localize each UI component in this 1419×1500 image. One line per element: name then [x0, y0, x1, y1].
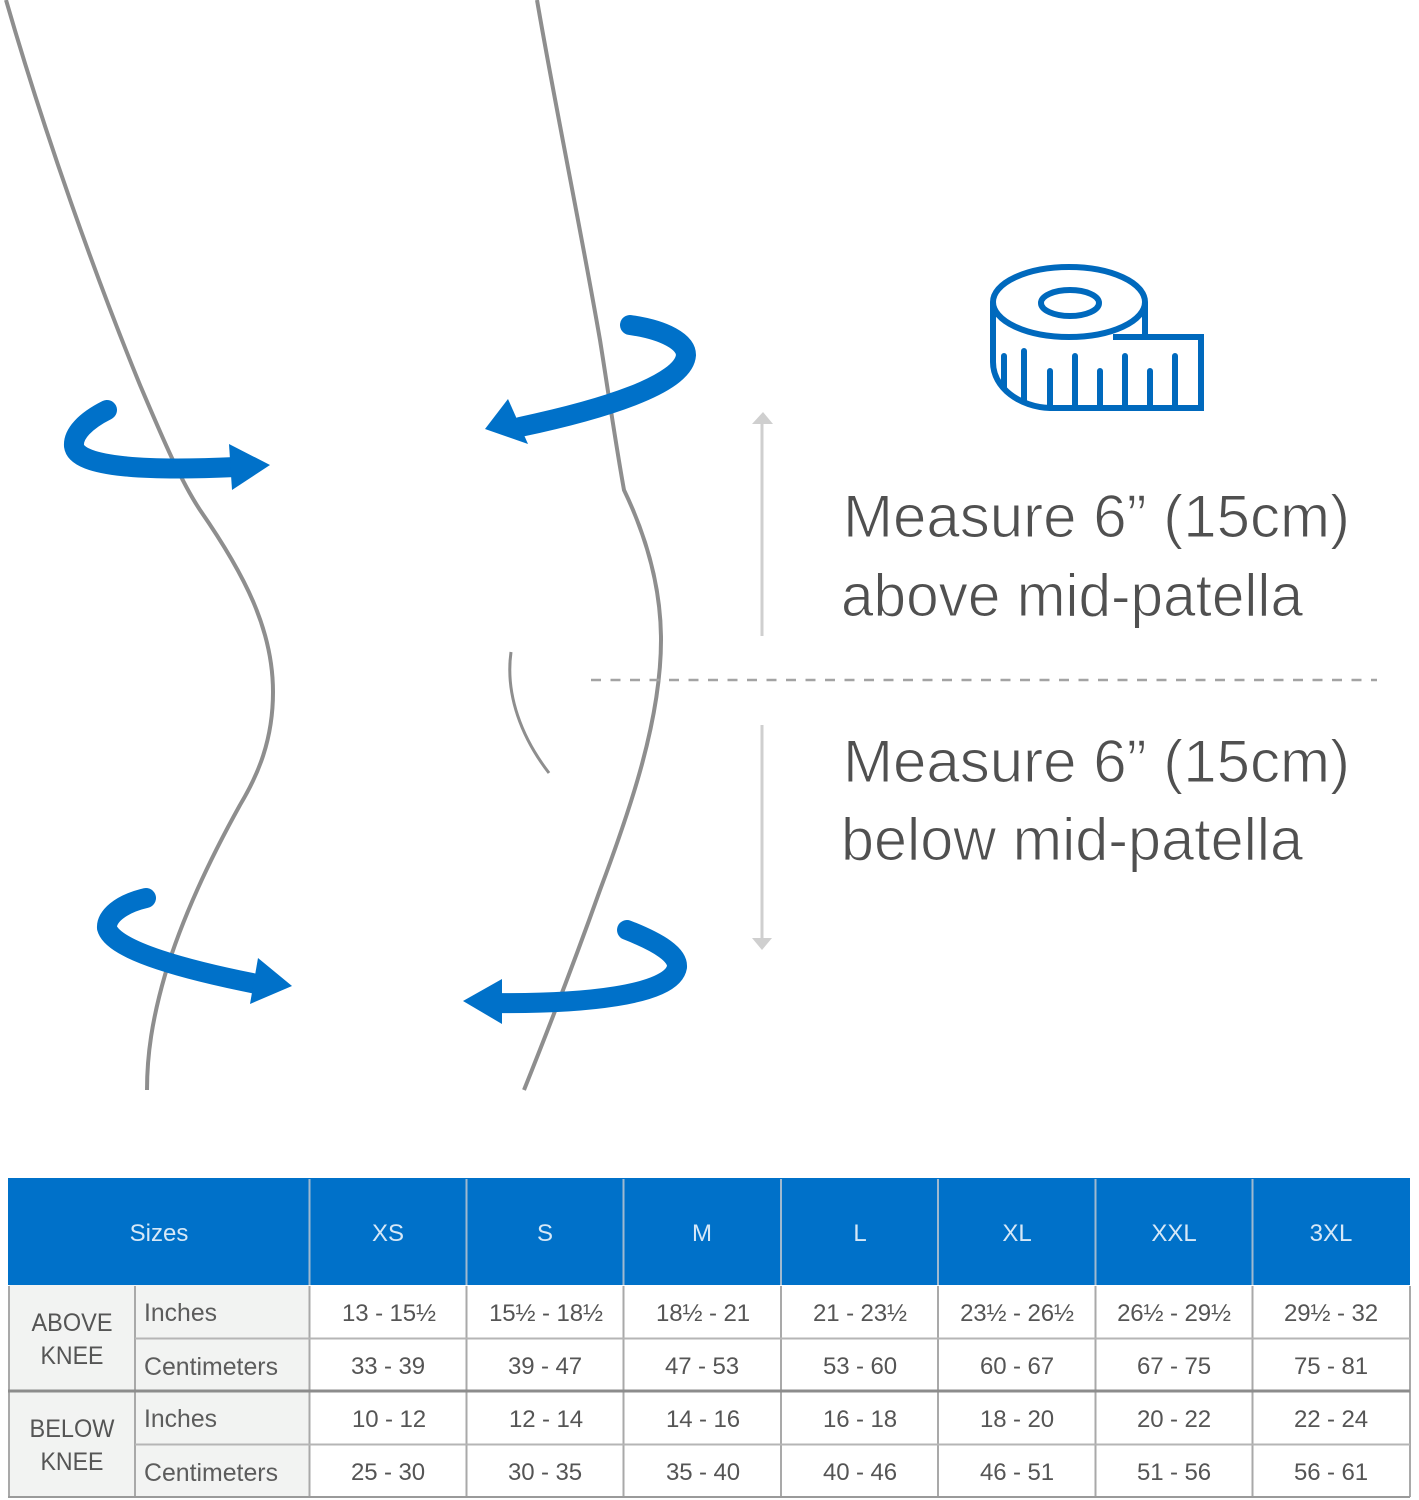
below knee inches row: 14 - 16: [666, 1406, 740, 1433]
arrow: lower left wrap: [107, 898, 292, 1004]
above knee inches row: 15½ - 18½: [489, 1300, 603, 1327]
below knee centimeters row: 51 - 56: [1137, 1459, 1211, 1486]
above knee centimeters row: 39 - 47: [508, 1353, 582, 1380]
above knee centimeters row: [351, 1353, 1368, 1380]
leg outline: left contour: [6, 0, 273, 1090]
header labels: XXL: [1151, 1220, 1197, 1247]
group label: above knee: ABOVE: [32, 1309, 112, 1337]
above knee inches row: 23½ - 26½: [960, 1300, 1074, 1327]
above knee inches row: [342, 1300, 1378, 1327]
unit labels: [144, 1299, 278, 1487]
unit labels: Centimeters: [144, 1459, 278, 1487]
below knee centimeters row: 25 - 30: [351, 1459, 425, 1486]
leg outline: right contour: [524, 0, 661, 1090]
above knee inches row: 18½ - 21: [656, 1300, 750, 1327]
group label: below knee: [30, 1415, 115, 1476]
table grid: [8, 1179, 1410, 1497]
group label: below knee: KNEE: [40, 1448, 104, 1476]
below knee inches row: 16 - 18: [823, 1406, 897, 1433]
header labels: [130, 1220, 1352, 1247]
above knee centimeters row: 47 - 53: [665, 1353, 739, 1380]
unit labels: Inches: [144, 1299, 217, 1327]
text: measure above: above mid-patella: [841, 562, 1304, 629]
unit labels: Centimeters: [144, 1353, 278, 1381]
below knee inches row: 18 - 20: [980, 1406, 1054, 1433]
text: measure above: Measure 6” (15cm): [843, 483, 1350, 550]
above knee centimeters row: 67 - 75: [1137, 1353, 1211, 1380]
above knee inches row: 29½ - 32: [1284, 1300, 1378, 1327]
above knee inches row: 13 - 15½: [342, 1300, 436, 1327]
header labels: M: [692, 1220, 712, 1247]
header labels: 3XL: [1310, 1220, 1352, 1247]
header labels: Sizes: [130, 1220, 188, 1247]
arrow: upper right wrap: [485, 325, 686, 444]
header labels: XS: [372, 1220, 404, 1247]
text: measure below: [841, 728, 1350, 873]
kneecap contour: [510, 652, 549, 773]
below knee inches row: [352, 1406, 1368, 1433]
above knee inches row: 26½ - 29½: [1117, 1300, 1231, 1327]
below knee inches row: 10 - 12: [352, 1406, 426, 1433]
below knee centimeters row: 35 - 40: [666, 1459, 740, 1486]
arrow: six inches above patella: [752, 412, 773, 636]
group label: below knee: BELOW: [30, 1415, 115, 1443]
header labels: XL: [1002, 1220, 1032, 1247]
above knee inches row: 21 - 23½: [813, 1300, 907, 1327]
icon: measuring tape: [993, 267, 1201, 408]
mid-patella dashed line: [591, 679, 1377, 681]
arrow: lower right wrap: [463, 930, 677, 1024]
unit labels: Inches: [144, 1405, 217, 1433]
above knee centimeters row: 33 - 39: [351, 1353, 425, 1380]
below knee centimeters row: 46 - 51: [980, 1459, 1054, 1486]
above knee centimeters row: 60 - 67: [980, 1353, 1054, 1380]
arrow: upper left wrap: [74, 410, 270, 490]
text: measure below: below mid-patella: [841, 806, 1304, 873]
arrow: six inches below patella: [752, 725, 772, 950]
group label: above knee: [32, 1309, 112, 1370]
sizing table: [8, 1178, 1410, 1497]
group label: above knee: KNEE: [40, 1342, 104, 1370]
text: measure above: [841, 483, 1350, 629]
table header band: [8, 1178, 1410, 1285]
below knee inches row: 20 - 22: [1137, 1406, 1211, 1433]
below knee centimeters row: 56 - 61: [1294, 1459, 1368, 1486]
below knee inches row: 22 - 24: [1294, 1406, 1368, 1433]
below knee inches row: 12 - 14: [509, 1406, 583, 1433]
below knee centimeters row: [351, 1459, 1368, 1486]
text: measure below: Measure 6” (15cm): [843, 728, 1350, 795]
above knee centimeters row: 53 - 60: [823, 1353, 897, 1380]
header labels: L: [853, 1220, 867, 1247]
below knee centimeters row: 30 - 35: [508, 1459, 582, 1486]
above knee centimeters row: 75 - 81: [1294, 1353, 1368, 1380]
row label backgrounds: [9, 1285, 309, 1497]
below knee centimeters row: 40 - 46: [823, 1459, 897, 1486]
header labels: S: [537, 1220, 553, 1247]
